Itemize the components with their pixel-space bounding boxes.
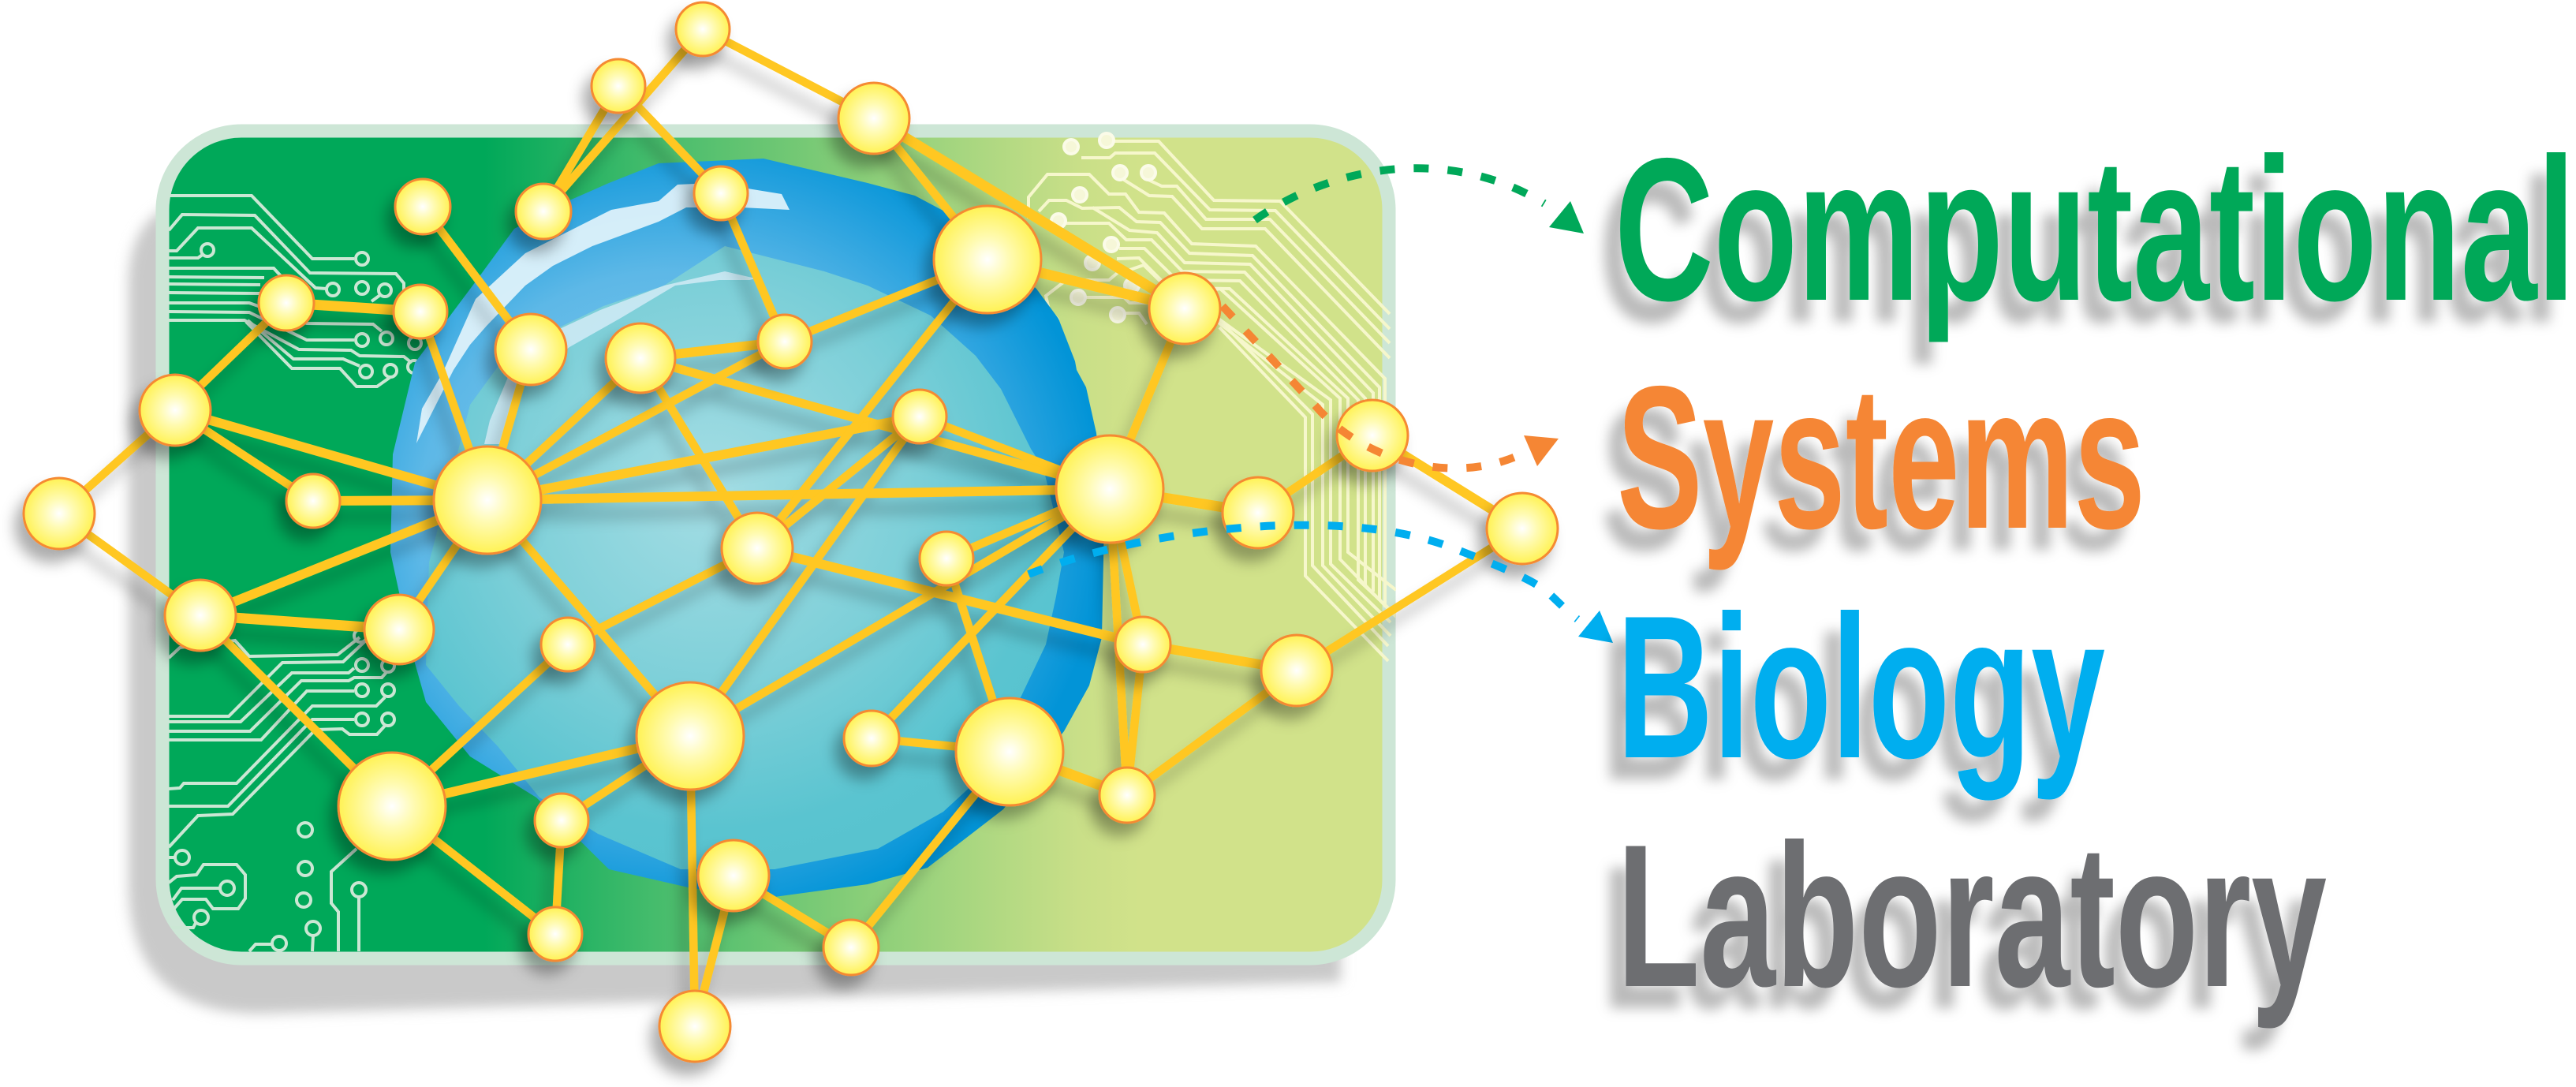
cell inner cytoplasm blob [426,246,1064,869]
network nodes [24,2,1558,1062]
cell outer membrane blob [390,159,1104,897]
panel: rounded circuit card [162,131,1389,958]
arrow: green dashed to Computational [1255,168,1584,233]
highlight: outer membrane shine [416,183,790,443]
title: Biology: Biology [1617,573,2106,801]
circuit traces: right side of card [1029,133,1396,661]
card drop shadow [129,197,1341,1014]
arrow: orange dashed to Systems [1223,306,1559,469]
network edges [59,29,1522,1026]
highlight: inner shine [484,271,756,444]
circuit traces: left side of card [163,196,421,951]
arrow: blue dashed to Biology [1029,525,1613,643]
title: Systems: Systems [1617,343,2145,572]
